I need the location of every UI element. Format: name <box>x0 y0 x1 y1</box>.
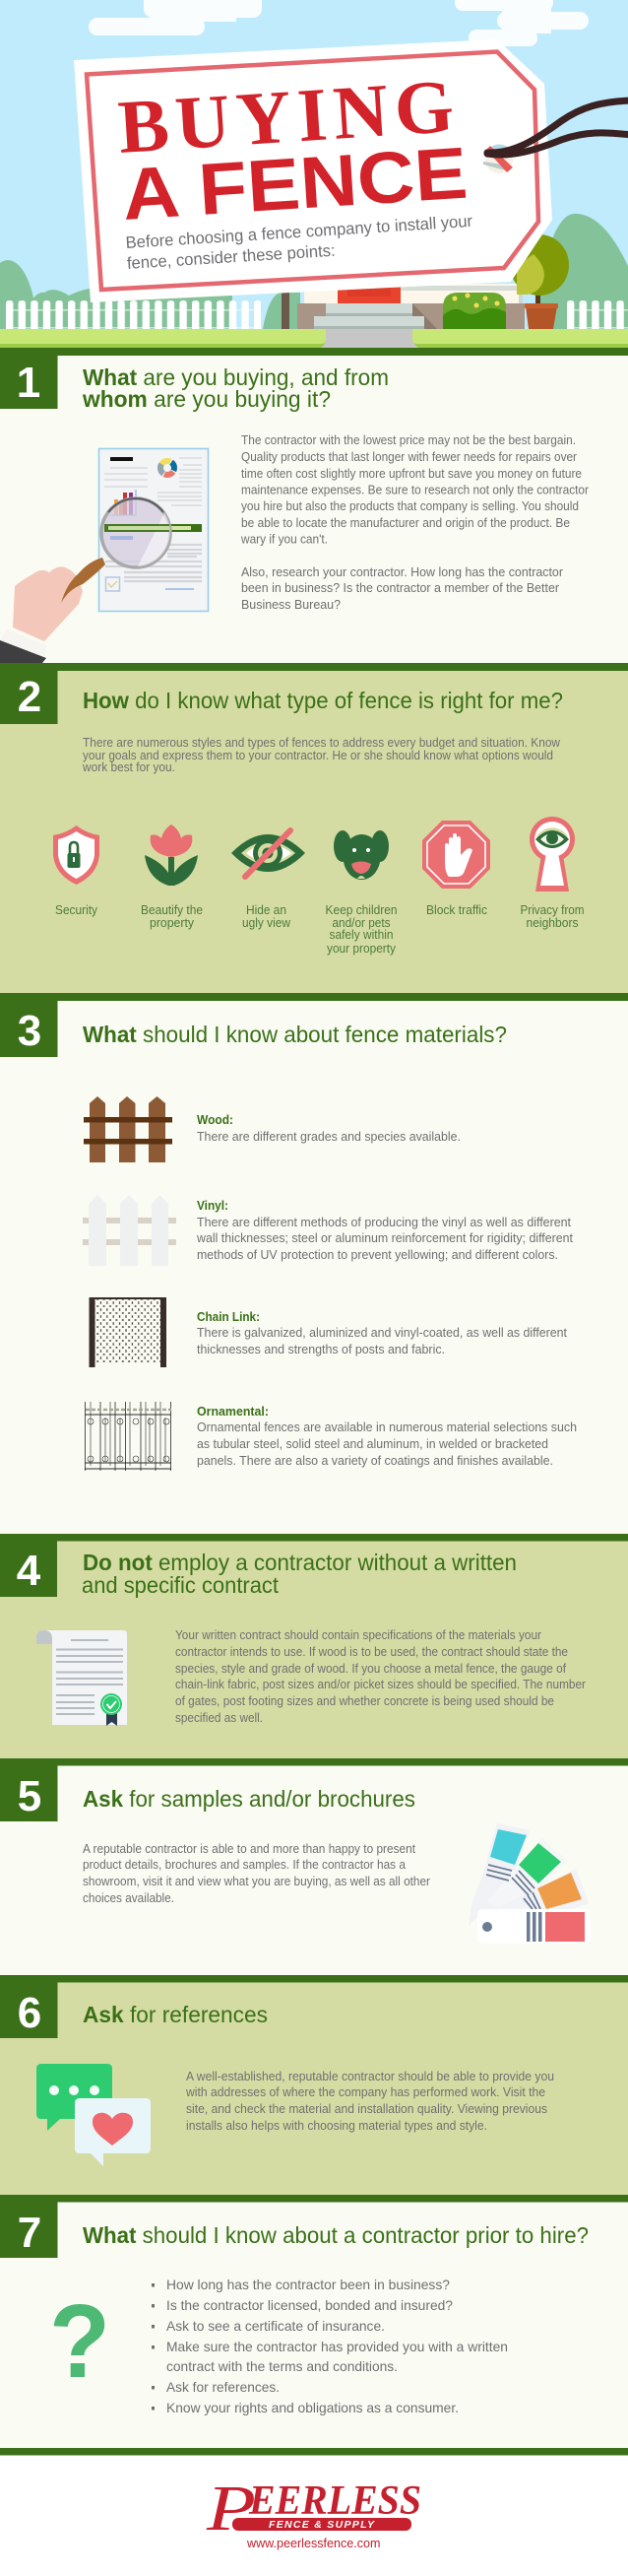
number badge 2 <box>0 663 57 724</box>
panel: section 6 <box>0 1975 628 2195</box>
hills <box>0 214 628 410</box>
heading 1: whom are you buying it? <box>82 386 331 412</box>
material: vinyl: There are different methods of producing the vinyl as well as different <box>197 1215 571 1229</box>
number badge 7: 7 <box>18 2209 41 2257</box>
bar chart <box>110 490 136 515</box>
document illustration <box>0 449 209 663</box>
pie chart <box>160 461 174 475</box>
material: vinyl: wall thicknesses; steel or aluminum reinforcement for rigidity; different <box>196 1230 573 1245</box>
bullet list <box>152 2277 508 2415</box>
icon: chat bubbles <box>36 2064 151 2166</box>
material: wood: Wood: <box>197 1112 233 1127</box>
body copy 5: A reputable contractor is able to and more than happy to present <box>83 1841 415 1856</box>
icon captions: ugly view <box>242 915 291 930</box>
body copy 4: Your written contract should contain specifications of the materials your <box>175 1627 542 1642</box>
body copy 4: contractor intends to use. If wood is to be used, the contract should state the <box>175 1644 568 1659</box>
heading 1 <box>82 364 389 412</box>
body copy 2: your goals and express them to your contractor. He or she should know what options would <box>83 748 553 762</box>
icon captions: Hide an <box>246 902 286 917</box>
picket fence left <box>6 300 261 337</box>
body copy 6: with addresses of where the company has performed work. Visit the <box>185 2084 545 2099</box>
bullet list: Ask to see a certificate of insurance. <box>166 2318 385 2334</box>
icon: chain link fence <box>89 1297 166 1367</box>
logo: peerless fence and supply: P <box>206 2473 256 2544</box>
icon captions: your property <box>327 941 396 956</box>
number badge 6 <box>0 1975 57 2038</box>
heading 1: What are you buying, and from <box>83 364 389 390</box>
subtitle: fence, consider these points: <box>126 241 336 273</box>
icon captions: property <box>150 915 194 930</box>
body copy 5: choices available. <box>83 1890 174 1905</box>
icon captions <box>55 902 585 956</box>
body copy 6: installs also helps with choosing material types and style. <box>186 2118 487 2133</box>
body copy 2 <box>82 735 561 774</box>
material: ornamental: Ornamental fences are available in numerous material selections such <box>197 1420 577 1434</box>
body copy 4 <box>175 1627 587 1725</box>
icon: signed contract <box>36 1630 127 1726</box>
material: vinyl: methods of UV protection to prevent yellowing; and different colors. <box>197 1247 558 1262</box>
material: ornamental: as tubular steel, solid steel and aluminum, in welded or bracketed <box>197 1436 548 1451</box>
body copy 1: be able to locate the manufacturer and origin of the product. Be <box>241 515 570 530</box>
bullet list: Is the contractor licensed, bonded and insured? <box>166 2297 453 2313</box>
title: buying: BUYING <box>116 63 456 169</box>
body copy 1: time often cost slightly more upfront but save you money on future <box>241 466 582 481</box>
body copy 1: Also, research your contractor. How long has the contractor <box>241 564 564 579</box>
body copy 5: product details, brochures and samples. If the contractor has a <box>83 1857 407 1872</box>
heading 3: What should I know about fence materials? <box>83 1022 507 1047</box>
number badge 6: 6 <box>18 1989 41 2037</box>
icon: crossed out eye <box>231 830 305 877</box>
icon: keyhole with eye <box>530 817 575 892</box>
header scene: sky, clouds, yard and house <box>0 0 628 410</box>
icon captions: Block traffic <box>426 902 487 917</box>
heading 6: Ask for references <box>83 2002 268 2027</box>
number badge 4: 4 <box>17 1547 41 1595</box>
bullet list: How long has the contractor been in business? <box>166 2277 450 2292</box>
number badge 1: 1 <box>17 359 40 407</box>
number badge 5 <box>0 1758 57 1821</box>
magnifying glass <box>101 498 170 567</box>
icon: stop sign with hand <box>422 821 490 889</box>
body copy 1 <box>240 432 590 612</box>
material: chain link: There is galvanized, aluminized and vinyl-coated, as well as different <box>197 1325 567 1340</box>
icon captions: Privacy from <box>520 902 585 917</box>
body copy 2: work best for you. <box>82 760 175 774</box>
icon: dog <box>334 830 389 880</box>
logo: peerless fence and supply: EERLESS <box>248 2478 421 2524</box>
material: ornamental: Ornamental: <box>197 1404 269 1419</box>
bullet list: Know your rights and obligations as a consumer. <box>166 2400 459 2415</box>
number badge 1 <box>0 348 57 409</box>
body copy 6: site, and check the material and installation quality. Viewing previous <box>186 2101 547 2116</box>
house <box>282 266 525 329</box>
bullet list: contract with the terms and conditions. <box>166 2358 398 2374</box>
panel: section 5 <box>0 1758 628 1975</box>
shrub <box>443 293 506 329</box>
icon: vinyl fence <box>83 1195 176 1266</box>
icon: colour swatch fan <box>469 1823 591 1944</box>
number badge 3: 3 <box>18 1007 41 1055</box>
material: wood: There are different grades and species available. <box>197 1129 461 1144</box>
logo: peerless fence and supply <box>206 2473 421 2544</box>
body copy 4: specified as well. <box>175 1710 263 1725</box>
number badge 4 <box>0 1534 57 1597</box>
material: vinyl: Vinyl: <box>197 1198 228 1213</box>
icon captions: Security <box>55 902 97 917</box>
number badge 5: 5 <box>18 1772 41 1820</box>
body copy 6: A well-established, reputable contractor should be able to provide you <box>186 2069 554 2083</box>
price tag title card <box>74 39 628 302</box>
icon captions: Beautify the <box>141 902 203 917</box>
cloud right <box>455 0 589 46</box>
body copy 1: Business Bureau? <box>241 597 341 612</box>
porch steps <box>314 303 424 329</box>
icon captions: and/or pets <box>333 915 391 930</box>
logo: peerless fence and supply: FENCE & SUPPLY <box>269 2519 375 2531</box>
body copy 4: species, style and grade of wood. If you choose a metal fence, the gauge of <box>175 1661 566 1676</box>
body copy 5: showroom, visit it and view what you are buying, as well as all other <box>83 1874 431 1888</box>
lawn and path <box>0 329 628 349</box>
tree and pot <box>510 234 569 329</box>
heading 2: How do I know what type of fence is right for me? <box>83 688 563 713</box>
heading 4: Do not employ a contractor without a written <box>83 1550 517 1575</box>
icon: security shield <box>53 826 99 885</box>
footer band <box>0 2448 628 2455</box>
panel: section 4 <box>0 1534 628 1758</box>
icon captions: Keep children <box>325 902 398 917</box>
tag eyelet <box>483 145 513 173</box>
icon captions: neighbors <box>526 915 579 930</box>
body copy 1: wary if you can't. <box>240 532 328 546</box>
body copy 1: Quality products that last longer with fewer needs for repairs over <box>241 449 578 464</box>
hand <box>0 566 83 663</box>
icon captions: safely within <box>329 927 394 942</box>
heading 4 <box>82 1550 517 1598</box>
icon: question mark: ? <box>49 2283 110 2400</box>
body copy 5 <box>83 1841 431 1905</box>
body copy 1: The contractor with the lowest price may not be the best bargain. <box>241 432 576 447</box>
body copy 1: maintenance expenses. Be sure to research not only the contractor <box>241 483 590 496</box>
material: ornamental: panels. There are also a variety of coatings and finishes available. <box>197 1453 553 1468</box>
panel: section 2 <box>0 663 628 993</box>
subtitle: Before choosing a fence company to install your <box>125 212 473 252</box>
panel: section 3 <box>0 993 628 1534</box>
website url: www.peerlessfence.com <box>246 2536 380 2550</box>
body copy 2: There are numerous styles and types of fences to address every budget and situation. Know <box>83 735 561 750</box>
icon: ornamental fence <box>85 1402 171 1471</box>
material: ornamental <box>197 1404 577 1468</box>
heading 7: What should I know about a contractor prior to hire? <box>83 2222 589 2248</box>
bullet list: Make sure the contractor has provided you with a written <box>166 2339 508 2354</box>
bullet list: Ask for references. <box>166 2379 280 2395</box>
number badge 7 <box>0 2195 57 2258</box>
icon: wood fence <box>84 1096 172 1162</box>
material: wood <box>197 1112 461 1144</box>
material: vinyl <box>196 1198 573 1262</box>
material: chain link <box>197 1309 567 1356</box>
material: chain link: Chain Link: <box>197 1309 260 1324</box>
body copy 4: of gates, post footing sizes and whether concrete is being used should be <box>175 1693 554 1708</box>
magnifier handle <box>61 558 105 603</box>
material: chain link: thicknesses and strengths of posts and fabric. <box>197 1342 445 1356</box>
body copy 1: been in business? Is the contractor a member of the Better <box>241 580 560 595</box>
body copy 4: chain-link fabric, post sizes and/or picket sizes should be specified. The number <box>175 1677 587 1691</box>
number badge 2: 2 <box>18 673 41 721</box>
number badge 3 <box>0 993 57 1057</box>
heading 5: Ask for samples and/or brochures <box>83 1786 415 1812</box>
title: a fence: A FENCE <box>120 131 470 235</box>
panel: section 7 <box>0 2195 628 2448</box>
icon: tulip <box>145 825 198 886</box>
cloud left <box>89 0 262 35</box>
heading 4: and specific contract <box>82 1572 280 1598</box>
picket fence right <box>567 300 628 337</box>
string <box>487 100 628 155</box>
body copy 6 <box>185 2069 554 2133</box>
body copy 1: you hire but also the products that company is selling. You should <box>241 498 579 513</box>
